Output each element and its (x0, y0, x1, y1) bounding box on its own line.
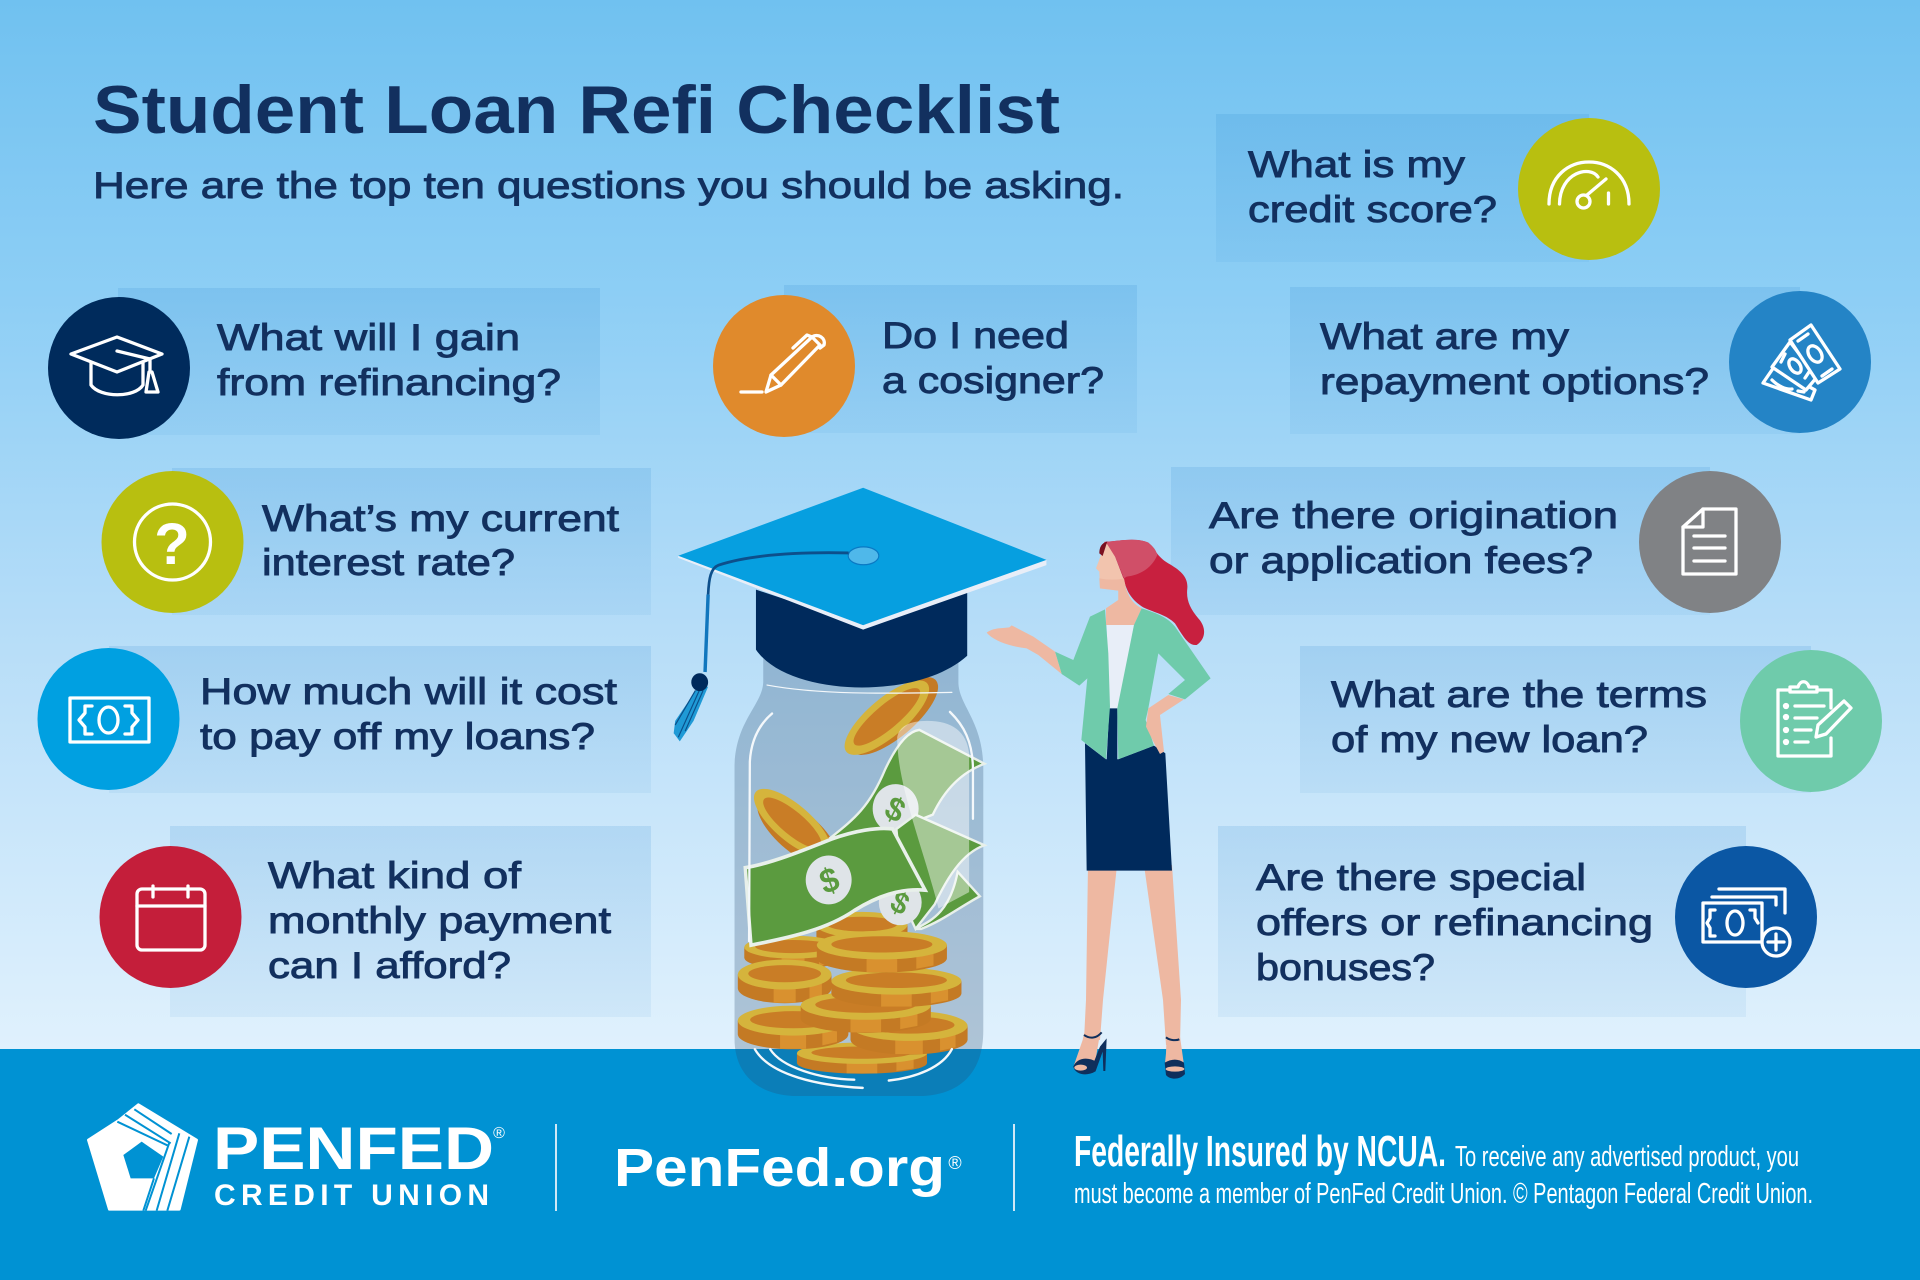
text: cosigner: Do I need (882, 315, 1069, 356)
circle: cost (38, 648, 180, 790)
text: interest rate: What’s my current (262, 498, 620, 539)
panel: gain from refinancing (48, 288, 600, 439)
falling coin left (745, 777, 849, 881)
text: monthly payment: What kind of (268, 855, 522, 896)
circle: cosigner (713, 295, 855, 437)
website: PenFed.org (614, 1138, 945, 1198)
glass highlight (897, 721, 969, 908)
panel: cost to pay off (38, 646, 651, 793)
panel: repayment options (1290, 287, 1871, 434)
icon: question mark: ? (154, 512, 190, 577)
legs (1084, 865, 1181, 1045)
circle: fees (1639, 471, 1781, 613)
text: interest rate: interest rate? (262, 542, 515, 583)
text: terms: of my new loan? (1331, 719, 1648, 760)
circle: monthly payment (100, 846, 242, 988)
panel: loan terms (1300, 646, 1882, 793)
logo: PenFed pentagon (88, 1105, 197, 1211)
subtitle: Here are the top ten questions you should be asking. (93, 165, 1124, 206)
panel: origination fees (1171, 467, 1781, 615)
text: fees: or application fees? (1209, 540, 1593, 581)
jar highlights (749, 685, 973, 1088)
text: cost: How much will it cost (200, 671, 618, 712)
front bill (745, 828, 925, 945)
text: terms: What are the terms (1331, 674, 1707, 715)
panel: current interest rate (102, 468, 651, 615)
footer band (0, 1049, 1920, 1280)
logo text: credit union: CREDIT UNION (214, 1179, 489, 1212)
falling coin top (835, 664, 949, 768)
icon: gauge (1549, 162, 1629, 208)
shoes and feet (1073, 1032, 1185, 1079)
icon: banknote (70, 698, 149, 742)
icon: pen (741, 335, 824, 392)
text: repayment: What are my (1320, 316, 1570, 357)
icon: document (1683, 509, 1736, 574)
icon: banknotes with plus (1703, 889, 1790, 956)
legal bold: Federally Insured by NCUA. (1074, 1127, 1446, 1176)
text: offers: bonuses? (1256, 947, 1435, 988)
text: repayment: repayment options? (1320, 361, 1709, 402)
panel: monthly payment (100, 826, 651, 1017)
text: credit score: What is my (1248, 144, 1466, 185)
jar glass (735, 656, 983, 1096)
circle: repayment (1729, 291, 1871, 433)
icon: fanned banknotes (1763, 325, 1840, 400)
graduation cap on jar (674, 488, 1046, 741)
torso, hair and arms (987, 540, 1211, 871)
text: gain: What will I gain (217, 317, 520, 358)
illustration: woman (987, 540, 1211, 1079)
circle: gain (48, 297, 190, 439)
icon: question mark (134, 504, 210, 580)
back coins (744, 912, 908, 969)
coin stack (738, 931, 968, 1074)
front bill: $ (815, 860, 844, 902)
logo text: PENFED: PENFED (213, 1115, 494, 1182)
icon: clipboard (1778, 682, 1851, 756)
registered mark website: ® (948, 1153, 962, 1173)
divider (1013, 1124, 1015, 1211)
text: monthly payment: can I afford? (268, 945, 511, 986)
back bills: $ (879, 789, 911, 830)
icon: graduation cap (71, 337, 162, 395)
text: offers: offers or refinancing (1256, 902, 1653, 943)
title: Student Loan Refi Checklist (93, 72, 1060, 148)
text: credit score: credit score? (1248, 189, 1497, 230)
text: cost: to pay off my loans? (200, 716, 595, 757)
circle: interest rate (102, 471, 244, 613)
circle: terms (1740, 650, 1882, 792)
text: offers: Are there special (1256, 857, 1586, 898)
back bills (831, 730, 984, 929)
back bills: $ (885, 884, 915, 923)
panel: cosigner (713, 285, 1137, 437)
registered mark: ® (493, 1125, 505, 1142)
illustration: jar with cap (674, 488, 1046, 1096)
text: fees: Are there origination (1209, 495, 1618, 536)
circle: credit score (1518, 118, 1660, 260)
divider (555, 1124, 557, 1211)
text: monthly payment: monthly payment (268, 900, 612, 941)
panel: credit score (1216, 114, 1660, 262)
text: gain: from refinancing? (217, 362, 561, 403)
icon: calendar (137, 886, 205, 950)
text: cosigner: a cosigner? (882, 360, 1104, 401)
panel: special offers (1218, 826, 1817, 1017)
circle: offers (1675, 846, 1817, 988)
